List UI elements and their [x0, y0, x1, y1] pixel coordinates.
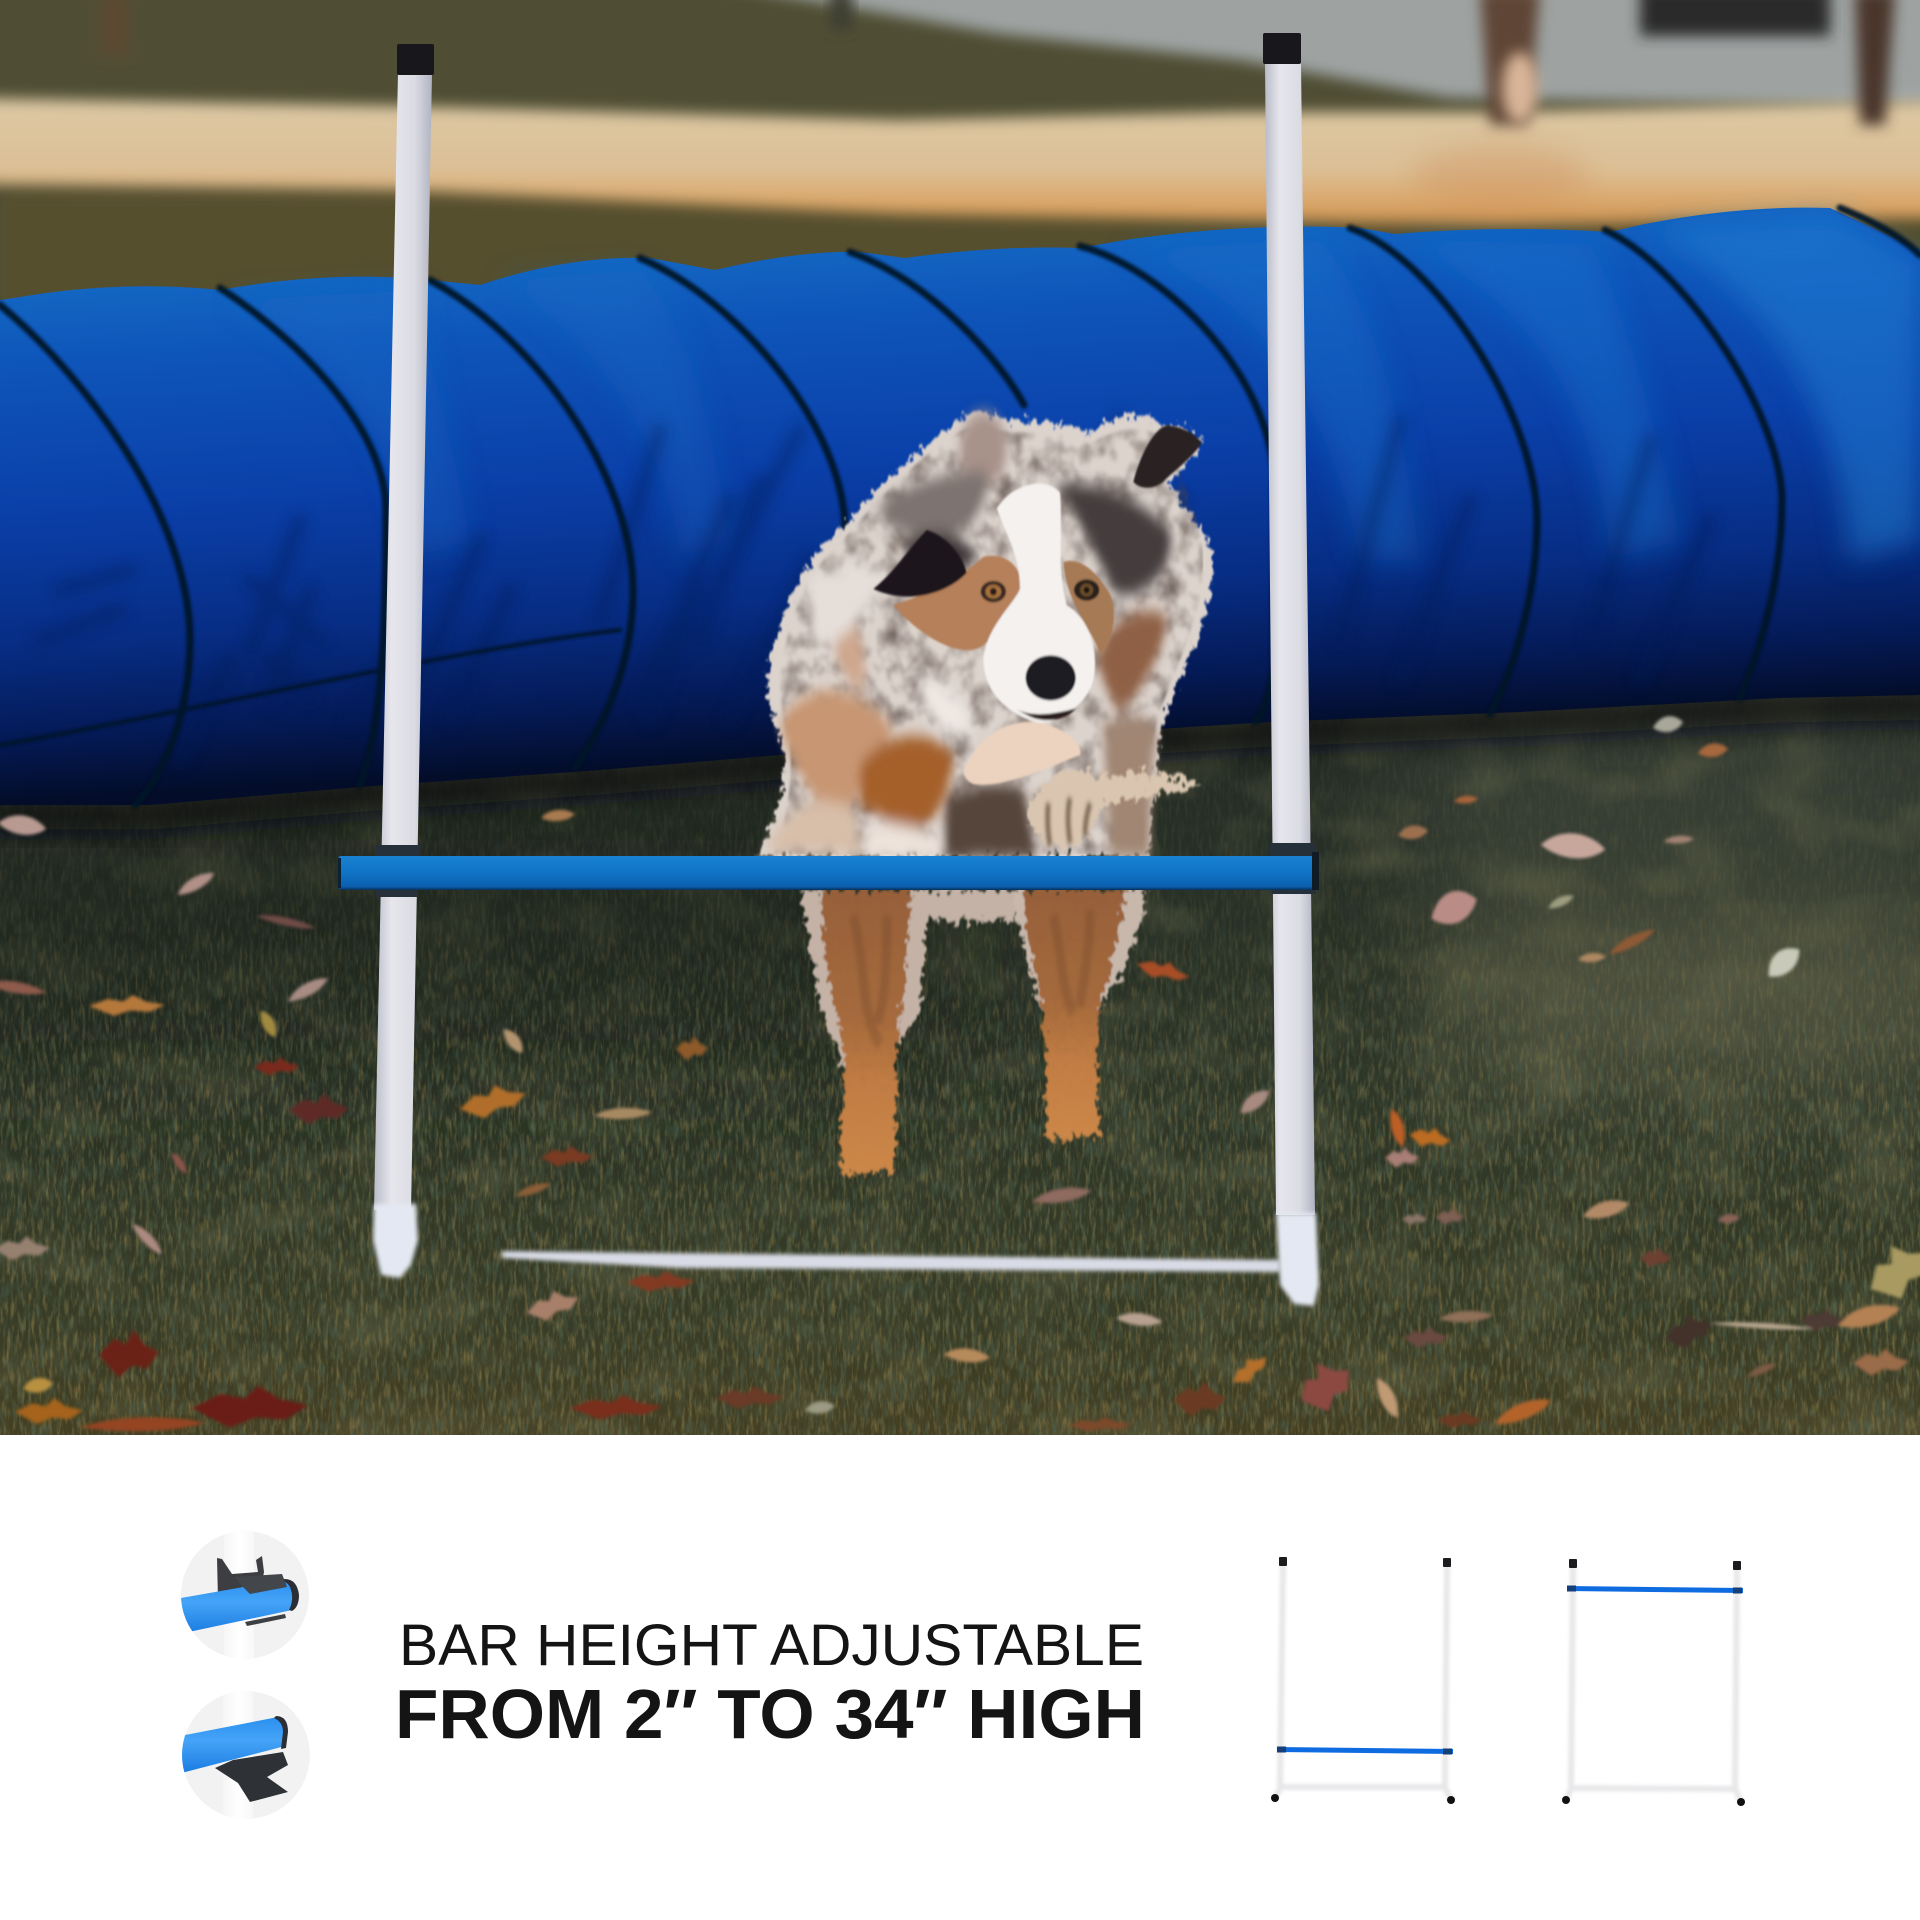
heading text — [395, 1613, 1145, 1753]
grass field — [0, 680, 1920, 1440]
dog legs — [800, 889, 1147, 1176]
photo: dog jumping over agility hurdle — [0, 0, 1920, 1440]
fallen leaves — [0, 716, 1920, 1432]
left hurdle post — [373, 44, 434, 1278]
product: hurdle with low bar — [1271, 1557, 1455, 1804]
blue jump bar with clips — [338, 843, 1319, 897]
right hurdle post — [1263, 33, 1319, 1306]
dog — [757, 412, 1213, 1176]
white caption panel — [0, 1435, 1920, 1920]
dog neck ruff — [1027, 770, 1203, 847]
heading text: BAR HEIGHT ADJUSTABLE — [399, 1613, 1144, 1678]
blue agility tunnel — [0, 208, 1920, 805]
product: hurdle with high bar — [1562, 1559, 1745, 1806]
heading text: FROM 2″ TO 34″ HIGH — [395, 1675, 1145, 1753]
icon: bar clip facing up — [170, 1525, 309, 1665]
dog body and head — [757, 412, 1213, 857]
hurdle base bar — [502, 1251, 1280, 1272]
blurred background park — [0, 0, 1920, 330]
icon: bar clip facing down — [170, 1685, 310, 1825]
